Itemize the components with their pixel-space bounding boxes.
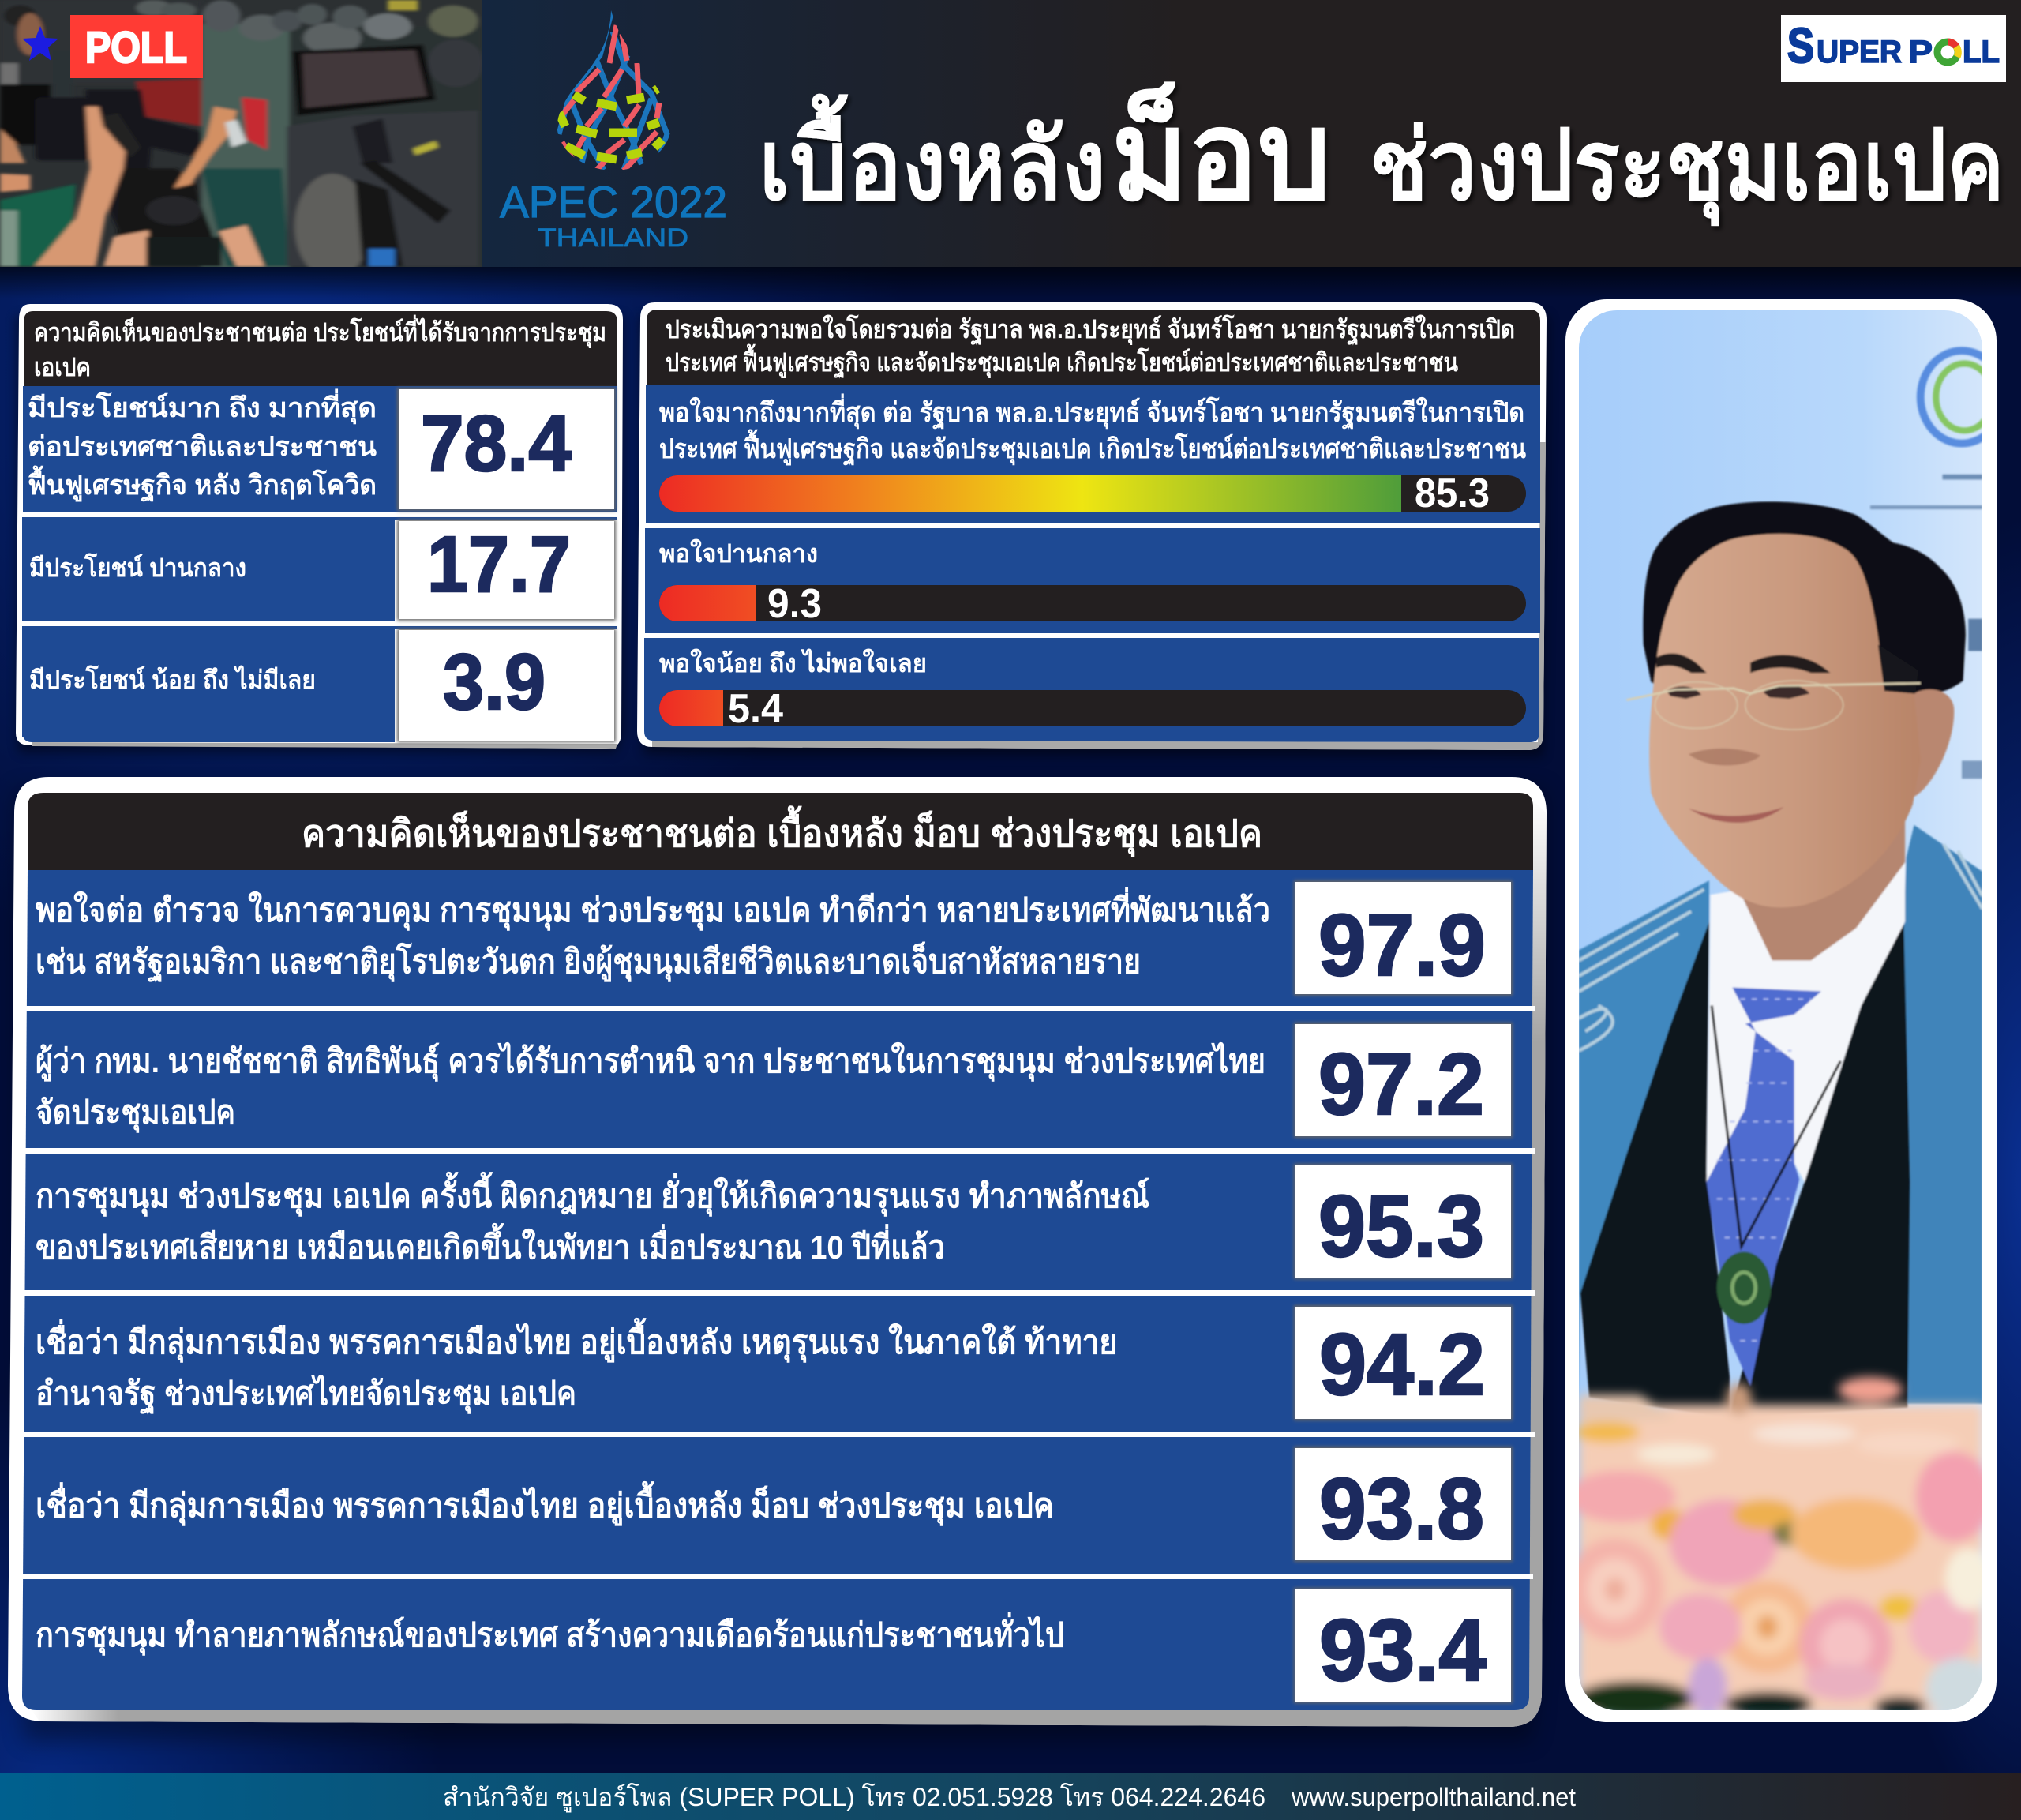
title: [759, 81, 2004, 227]
bar: 9.3: [659, 585, 1526, 621]
row: little or not satisfied 5.4: พอใจน้อย ถึง ไม่พอใจเลย: [659, 648, 927, 677]
panel: perceived benefit of APEC: [16, 304, 624, 752]
panel header: ความคิดเห็นของประชาชนต่อ ประโยชน์ที่ได้รับจากการประชุม: [34, 314, 606, 349]
logo: Super Poll: LL: [1963, 35, 2000, 69]
photo: protest at police shield line: [0, 0, 483, 279]
separators: [22, 1006, 1535, 1579]
icon: woven water drop: [559, 10, 667, 171]
row 2: governor criticism 97.2: 97.2: [1318, 1036, 1484, 1133]
row: little or not satisfied 5.4: [644, 638, 1539, 742]
bar: 5.4: [659, 690, 1526, 726]
face: [1649, 534, 1921, 907]
logo: APEC 2022 Thailand: [500, 10, 727, 252]
row: little or not satisfied 5.4: 5.4: [728, 686, 783, 732]
panel header: ประเมินความพอใจโดยรวมต่อ รัฐบาล พล.อ.ประยุทธ์ จันทร์โอชา นายกรัฐมนตรีในการเปิด: [666, 314, 1515, 346]
panel: overall satisfaction with the government: [637, 302, 1549, 756]
necklace: [1712, 1006, 1840, 1247]
row 4: political groups behind southern violence 94.2: เชื่อว่า มีกลุ่มการเมือง พรรคการเมืองไทย อยู่เบื้องหลัง เหตุรุนแรง ในภาคใต้ ท้าทาย: [36, 1317, 1117, 1363]
row 6: rally damages image 93.4: [22, 1579, 1530, 1710]
panel header: ประเทศ ฟื้นฟูเศรษฐกิจ และจัดประชุมเอเปค เกิดประโยชน์ต่อประเทศชาติและประชาชน: [666, 343, 1458, 379]
row: moderate benefit 17.7: [22, 517, 617, 621]
row: moderate benefit 17.7: มีประโยชน์ ปานกลาง: [29, 553, 246, 582]
header band: [0, 0, 2021, 279]
white shirt and collar: [1707, 862, 1905, 1265]
panel header: [24, 311, 617, 386]
panel header: [647, 310, 1540, 385]
row 6: rally damages image 93.4: การชุมนุม ทำลายภาพลักษณ์ของประเทศ สร้างความเดือดร้อนแก่ประชาชนทั่วไป: [36, 1612, 1064, 1656]
row: little benefit 3.9: 3.9: [443, 638, 546, 726]
hair: [1643, 501, 1966, 722]
row 4: political groups behind southern violence 94.2: [24, 1296, 1531, 1432]
panel header: เอเปค: [34, 353, 91, 381]
blue scarf: [1579, 880, 1709, 1405]
icon: red POLL badge: [70, 15, 203, 78]
jade pendant: [1717, 1251, 1771, 1324]
row: moderately satisfied 9.3: พอใจปานกลาง: [659, 538, 818, 568]
panel: public opinion on the mob behind APEC: [8, 777, 1547, 1741]
logo: Super Poll: P: [1908, 35, 1933, 69]
row 5: political groups behind the mob 93.8: 93.8: [1319, 1461, 1484, 1558]
row: much benefit 78.4: มีประโยชน์มาก ถึง มากที่สุด: [28, 388, 377, 425]
row 1: police control 97.9: เช่น สหรัฐอเมริกา และชาติยุโรปตะวันตก ยิงผู้ชุมนุมเสียชีวิตและบาดเจ็บสาหัสหลายราย: [36, 941, 1141, 983]
row 3: illegal rally 95.3: การชุมนุม ช่วงประชุม เอเปค ครั้งนี้ ผิดกฎหมาย ยั่วยุให้เกิดความรุนแรง ทำภาพลักษณ์: [36, 1171, 1149, 1217]
row 1: police control 97.9: 97.9: [1318, 897, 1486, 994]
row 4: political groups behind southern violence 94.2: 94.2: [1319, 1316, 1485, 1413]
flowers: [1566, 1377, 1993, 1720]
title: เบื้องหลัง: [759, 93, 1106, 220]
footer: สำนักวิจัย ซูเปอร์โพล (SUPER POLL) โทร 02.051.5928 โทร 064.224.2646: [443, 1783, 1265, 1813]
eyes: [1667, 686, 1701, 699]
panel: portrait photo: [1565, 299, 2003, 1722]
text: APEC 2022: APEC 2022: [500, 177, 727, 227]
row: satisfied 85.3: ประเทศ ฟื้นฟูเศรษฐกิจ และจัดประชุมเอเปค เกิดประโยชน์ต่อประเทศชาติและประชาชน: [659, 429, 1526, 467]
nose: [1689, 749, 1760, 765]
icon: red POLL badge: POLL: [85, 22, 187, 72]
row 3: illegal rally 95.3: ของประเทศเสียหาย เหมือนเคยเกิดขึ้นในพัทยา เมื่อประมาณ 10 ปีที่แล้ว: [36, 1222, 945, 1266]
row 1: police control 97.9: พอใจต่อ ตำรวจ ในการควบคุม การชุมนุม ช่วงประชุม เอเปค ทำดีกว่า หลายประเทศที่พัฒนาแล้ว: [36, 887, 1270, 931]
mouth: [1689, 807, 1784, 823]
logo: Super Poll: UPER: [1817, 35, 1902, 69]
panel heading: [28, 793, 1533, 870]
neck: [1739, 799, 1905, 960]
row: moderately satisfied 9.3: 9.3: [767, 581, 822, 627]
suit jacket: [1580, 921, 1730, 1418]
row 4: political groups behind southern violence 94.2: อำนาจรัฐ ช่วงประเทศไทยจัดประชุม เอเปค: [36, 1374, 576, 1415]
row: much benefit 78.4: ฟื้นฟูเศรษฐกิจ หลัง วิกฤตโควิด: [28, 465, 377, 503]
glasses: [1626, 681, 1921, 730]
hair sideburn: [1878, 644, 1918, 693]
logo: Super Poll: S: [1787, 19, 1814, 73]
row: much benefit 78.4: ต่อประเทศชาติและประชาชน: [28, 432, 377, 462]
row: little benefit 3.9: มีประโยชน์ น้อย ถึง ไม่มีเลย: [29, 665, 316, 694]
logo: Super Poll: [1781, 15, 2006, 82]
row 2: governor criticism 97.2: ผู้ว่า กทม. นายชัชชาติ สิทธิพันธุ์ ควรได้รับการตำหนิ จาก ประชาชนในการชุมนุม ช่วงประเทศไทย: [36, 1041, 1265, 1082]
icon: blue star: [22, 26, 58, 61]
row: much benefit 78.4: 78.4: [421, 400, 572, 488]
row 5: political groups behind the mob 93.8: เชื่อว่า มีกลุ่มการเมือง พรรคการเมืองไทย อยู่เบื้องหลัง ม็อบ ช่วงประชุม เอเปค: [36, 1480, 1054, 1526]
photo: prime minister with flowers: [1566, 310, 2003, 1720]
row 3: illegal rally 95.3: [25, 1154, 1532, 1290]
text: THAILAND: THAILAND: [538, 223, 688, 252]
title: ม็อบ: [1112, 81, 1331, 226]
backdrop logo: [1915, 346, 1982, 448]
ear: [1910, 689, 1954, 797]
bar: 85.3: [659, 475, 1526, 512]
footer: [0, 1773, 2021, 1820]
row: satisfied 85.3: [646, 385, 1540, 523]
blue tie: [1707, 988, 1821, 1386]
row 6: rally damages image 93.4: 93.4: [1319, 1602, 1487, 1699]
row 5: political groups behind the mob 93.8: [23, 1437, 1531, 1574]
row: moderately satisfied 9.3: [645, 528, 1540, 633]
row 1: police control 97.9: [27, 870, 1533, 1006]
row 2: governor criticism 97.2: [26, 1011, 1532, 1148]
row: moderate benefit 17.7: 17.7: [427, 520, 571, 609]
panel heading: ความคิดเห็นของประชาชนต่อ เบื้องหลัง ม็อบ ช่วงประชุม เอเปค: [302, 805, 1262, 857]
row 2: governor criticism 97.2: จัดประชุมเอเปค: [36, 1094, 235, 1133]
footer: www.superpollthailand.net: [1291, 1783, 1576, 1811]
eyebrows: [1656, 654, 1707, 673]
row: satisfied 85.3: 85.3: [1415, 471, 1490, 516]
row: satisfied 85.3: พอใจมากถึงมากที่สุด ต่อ รัฐบาล พล.อ.ประยุทธ์ จันทร์โอชา นายกรัฐมนตรีในการเปิด: [659, 393, 1524, 430]
row 3: illegal rally 95.3: 95.3: [1318, 1178, 1484, 1275]
row: much benefit 78.4: [23, 386, 617, 512]
row: little benefit 3.9: [22, 626, 617, 742]
